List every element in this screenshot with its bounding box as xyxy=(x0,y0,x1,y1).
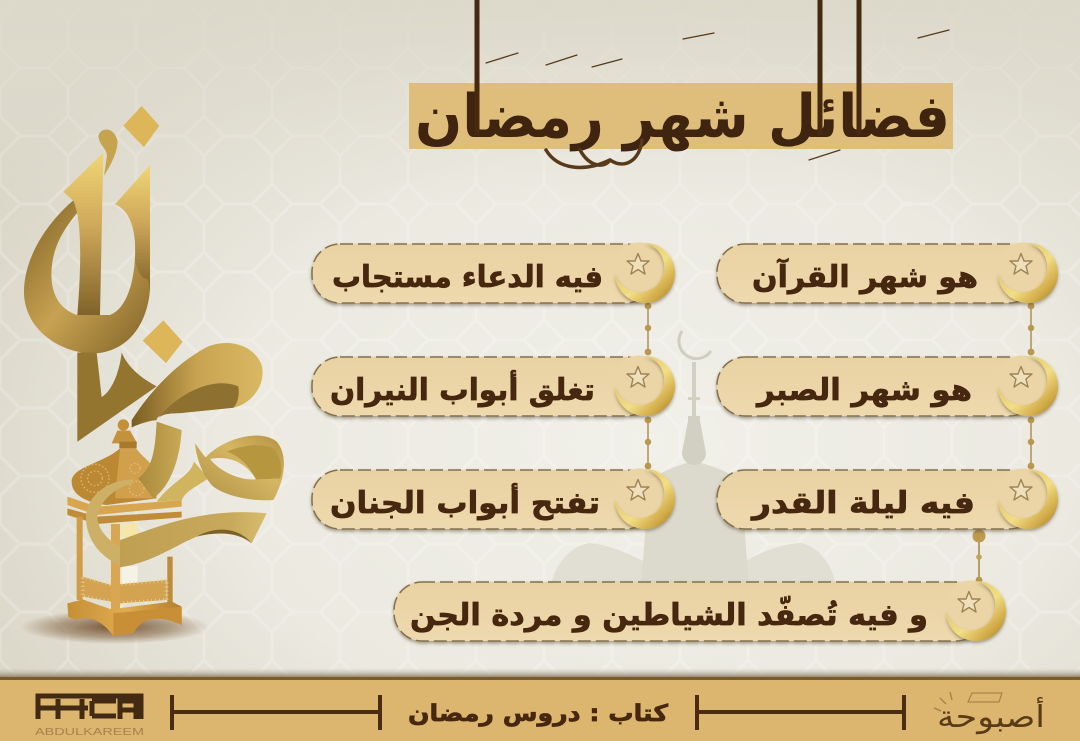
footer band xyxy=(0,668,1080,741)
title tall strokes xyxy=(477,0,859,135)
title xyxy=(415,0,950,152)
logo: Abdulkareem: ABDULKAREEM xyxy=(35,727,144,738)
panel: هو شهر القرآن xyxy=(717,242,1058,303)
panel: هو شهر الصبر: هو شهر الصبر xyxy=(755,373,972,408)
panel: تغلق أبواب النيران: تغلق أبواب النيران xyxy=(330,370,595,408)
lantern shadow xyxy=(20,610,210,644)
footer right divider xyxy=(697,695,904,730)
panel: فيه الدعاء مستجاب xyxy=(312,242,675,303)
footer left divider xyxy=(172,695,380,730)
panel: تفتح أبواب الجنان: تفتح أبواب الجنان xyxy=(330,483,600,521)
panel: هو شهر القرآن: هو شهر القرآن xyxy=(752,258,978,295)
calligraphy upper part xyxy=(24,106,183,442)
title diacritic marks xyxy=(486,30,949,167)
logo: Abdulkareem xyxy=(35,696,144,738)
panel: فيه ليلة القدر: فيه ليلة القدر xyxy=(750,486,975,521)
lantern xyxy=(67,419,182,636)
panel: فيه ليلة القدر xyxy=(717,468,1058,529)
mosque silhouette xyxy=(550,331,837,600)
panel: و فيه تصفد الشياطين و مردة الجن xyxy=(394,580,1006,641)
title: فضائل شهر رمضان xyxy=(415,82,950,152)
panel: هو شهر الصبر xyxy=(717,355,1058,416)
logo: Osbouha: أصبوحة xyxy=(937,696,1045,735)
panel: تغلق أبواب النيران xyxy=(312,355,675,416)
chains linking the pills xyxy=(645,303,1034,584)
panel: تفتح أبواب الجنان xyxy=(312,468,675,529)
panel: فيه الدعاء مستجاب: فيه الدعاء مستجاب xyxy=(332,260,603,295)
title band xyxy=(409,83,953,149)
footer book title: كتاب : دروس رمضان xyxy=(408,701,669,727)
logo: Osbouha xyxy=(934,692,1045,735)
panel: و فيه تصفد الشياطين و مردة الجن: و فيه تُصفّد الشياطين و مردة الجن xyxy=(410,596,928,633)
calligraphy lower part xyxy=(86,343,284,567)
